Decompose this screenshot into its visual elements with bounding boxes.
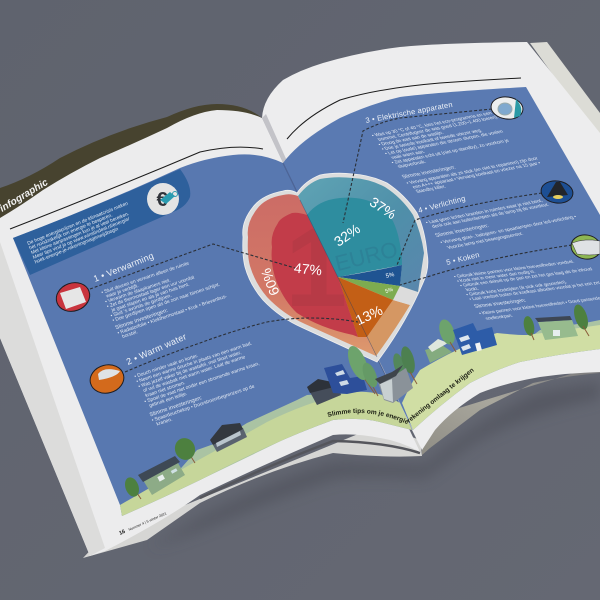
footer — [118, 510, 168, 537]
text block 3: Standby killer. — [415, 184, 448, 195]
text block 2 — [134, 336, 270, 428]
text block 4: denk ook aan buitenlampen als de lamp bij de voordeur. — [431, 202, 551, 230]
header rule left — [10, 147, 263, 229]
text block 4: • Vervang gloei-, halogeen- en spaarlampen door led-verlichting • — [439, 214, 578, 245]
text block 5: Slimme investeringen: — [473, 298, 528, 310]
text block 1: • Sluit deuren en verwarm alleen de ruimte — [101, 261, 190, 296]
text block 2: • Douch minder vaak en korter. — [134, 353, 199, 380]
slogan left part: Slimme tips om je energie — [328, 408, 408, 424]
label 32%: 32% — [331, 220, 363, 250]
header rule right — [287, 78, 521, 139]
green hill right — [402, 325, 600, 430]
inner wedge: heating 47% — [272, 213, 358, 337]
text block 2: • Neem een warme douche in plaats van een warm bad. — [136, 341, 253, 385]
tree: center 2 — [360, 361, 380, 396]
landscape right — [402, 320, 600, 430]
dark back cover edge — [0, 104, 262, 225]
spine line over chart — [300, 200, 377, 357]
dashed leader 1 — [90, 244, 295, 289]
euro watermark: EURO — [332, 236, 400, 276]
text block 3: • Droog de was aan de waslijn. — [377, 130, 445, 148]
inner wedge: electrical 32% — [307, 198, 402, 277]
label 5% blue: 5% — [385, 272, 396, 280]
text block 5: kookt. — [465, 286, 480, 293]
heading 3: 3 • Elektrische apparaten — [365, 100, 453, 125]
text block 1: waar je verblijft. — [105, 283, 140, 300]
right page — [262, 42, 600, 450]
text block 1: • Verwarm de slaapkamers niet. — [104, 277, 172, 305]
stack dark layer — [200, 441, 420, 498]
inner wedge: cooking 13% — [338, 277, 393, 337]
text block 2: • Was jezelf vaker bij de wastafel, met bloot water, — [138, 350, 242, 390]
outer ring: heating — [248, 194, 376, 356]
text block 5: snelkookpan. — [484, 313, 515, 322]
text block 1: • Radiatorfolie • Klokthermostaat • Kruk • Brievenbus- — [117, 294, 228, 336]
text block 3: sluipverbruik. — [396, 159, 428, 170]
text block 4: • Laat geen lichten branden in ruimtes waar je niet bent, — [425, 198, 544, 226]
text block 5: • Gebruik korte kooktijden (ik stuk ook gesneden). — [465, 280, 569, 298]
dashed leader 3 — [343, 109, 492, 223]
text block 4 — [425, 195, 583, 251]
text block 5: • Gebruik kleine pannen voor kleine hoeveelheden voedsel. — [453, 259, 576, 280]
text block 1: borstel. — [121, 329, 139, 340]
text block 1: • Sluit 's avonds de gordijnen. — [110, 293, 173, 319]
icon: radiator — [52, 278, 94, 316]
label 5% green: 5% — [385, 287, 394, 295]
text block 5: • Kook niet in meer water dan nodig is. — [456, 269, 537, 284]
outer ring: rest — [393, 288, 418, 305]
intro text: hoek-energie-je-rekeningmagenwijdbegin — [34, 226, 120, 265]
house: green left — [138, 456, 185, 495]
text block 3: trommel. Centrifugeer de was goed (1.200–1.400 toeren). — [377, 115, 500, 143]
text block 3: • Doe je tweede koelkast of tweede vriezer weg. — [380, 128, 484, 152]
heart border — [243, 173, 428, 362]
blue spread left — [13, 154, 412, 516]
icon: lamp — [540, 179, 574, 205]
text block 3: vaak warm aan. — [390, 149, 427, 161]
blue spread right — [283, 87, 600, 430]
text block 3: • Zet apparaten echt uit (niet op standby), zo voorkom je — [390, 138, 511, 166]
text block 2: gebruik een teiltje. — [148, 391, 188, 409]
text block 5 — [453, 258, 600, 322]
text block 2: Slimme investeringen: — [149, 395, 204, 418]
text block 1: Slimme investeringen: — [115, 308, 169, 331]
text block 1: je gaat slapen en als je van huis bent. — [110, 282, 190, 314]
tree: dark pair — [391, 345, 417, 384]
label 60%: 60% — [258, 266, 282, 298]
dashed leader 4 — [397, 193, 542, 265]
intro text: De hoge energieprijzen en de klimaatcrisis maken — [27, 201, 129, 247]
intro panel — [13, 169, 190, 275]
pale hills right — [520, 320, 600, 345]
text block 5: • Kleine pannen voor kleine hoeveelheden • Goed passende — [478, 296, 600, 317]
text block 3: Slimme investeringen: — [401, 165, 458, 180]
label 47%: 47% — [293, 260, 323, 278]
tree: right 1 — [522, 315, 536, 340]
spine fold — [262, 114, 287, 163]
right page edge — [530, 42, 600, 140]
text block 2: kraan niet stromen. — [144, 380, 186, 399]
page stack right — [420, 365, 600, 455]
text block 3: • Was op 30 °C of 40 °C, kies het eco-programma en een volle — [371, 109, 504, 139]
text block 4: Voorzie lamp met bewegingssensor. — [446, 231, 525, 251]
tree: left 1 — [122, 475, 142, 499]
tree: right blue side — [436, 317, 458, 352]
house: pale green right — [425, 339, 452, 363]
left page stack edge — [0, 242, 105, 556]
text block 1: • Zet de thermostaat lager een uur voordat — [106, 274, 196, 310]
text block 4: Slimme investeringen: — [434, 223, 491, 239]
inner wedge: lighting 5% — [338, 265, 402, 286]
text block 2: kranen. — [156, 417, 173, 427]
text block 2: • Spaardouchekop • Doorstroombegrenzers op de — [151, 384, 256, 424]
left page — [0, 110, 420, 556]
heading 1: 1 • Verwarming — [92, 251, 155, 284]
house: green far right — [535, 316, 578, 340]
outer ring: cooking — [367, 300, 410, 356]
icon: euro plug: € — [156, 189, 168, 211]
text block 5: • Gebruik een deksel op de pan en zet het gas laag als de inhoud — [459, 267, 594, 289]
text block 1: • Doe gordijnen open als de zon naar binnen schijnt. — [112, 282, 221, 324]
heading 5: 5 • Koken — [445, 250, 481, 267]
intro text: het noodzakelijk om energie te besparen. — [28, 212, 113, 252]
icon: shower — [87, 361, 127, 397]
pale hills left — [143, 392, 345, 495]
text block 3: een A+++ apparaat • Vervang koelkast en vriezer na 15 jaar • — [411, 161, 542, 190]
page stack left — [83, 425, 422, 558]
landscape left — [120, 392, 412, 516]
text block 5: • Laat voedsel buiten de koelkast afkoelen voordat je het erin zet. — [468, 280, 600, 302]
inner wedge: green 5% — [338, 277, 400, 300]
icon: washing machine — [490, 95, 524, 121]
icon: cooking pot — [569, 233, 600, 261]
intro text — [27, 201, 137, 265]
house: blue right — [453, 323, 497, 355]
intro text: Met kleine aanpassingen kun je al veel bereiken. — [30, 211, 130, 256]
heading 4: 4 • Verlichting — [417, 194, 466, 215]
spine line — [283, 163, 412, 430]
house: blue apartment — [324, 364, 367, 394]
heart chart — [243, 173, 428, 362]
slogan right part: rekening omlaag te krijgen — [406, 367, 476, 425]
tree: left 2 — [172, 435, 198, 463]
house: grey left — [210, 423, 247, 452]
text block 2: • Spoel de vaat niet onder een stromende warme kraan, — [144, 361, 260, 405]
tree: center 1 — [344, 343, 375, 394]
label 13%: 13% — [353, 302, 385, 328]
tree: right 2 — [571, 303, 591, 336]
text block 1 — [101, 253, 230, 341]
text block 2: of vul de wasbak met warm water. Laat de warme — [142, 354, 247, 394]
icon: euro plug — [147, 183, 179, 215]
dashed leader 2 — [125, 318, 358, 372]
big numeral watermark: 1 — [285, 205, 347, 330]
green hill left — [120, 392, 412, 516]
text block 3: • Vervang apparaten als ze stuk (en niet te repareren) zijn door — [405, 156, 540, 186]
label 37%: 37% — [367, 194, 399, 222]
house: grey on spine — [375, 365, 413, 403]
text block 3 — [371, 108, 546, 195]
heading 2: 2 • Warm water — [125, 331, 188, 367]
intro text: Meer tips vind je op www.winstindeel.nl/energie/ — [32, 216, 131, 261]
book shadow — [150, 382, 600, 548]
house: dark — [307, 379, 341, 405]
dashed leader 5 — [400, 245, 572, 285]
footer: Nummer 4 | 5 winter 2021 — [128, 511, 167, 532]
outer ring: electrical, lighting — [298, 177, 424, 292]
footer: 16 — [118, 529, 126, 537]
text block 3: • Let op (oude) apparaten die stroom slurpen, die voelen — [384, 129, 505, 157]
